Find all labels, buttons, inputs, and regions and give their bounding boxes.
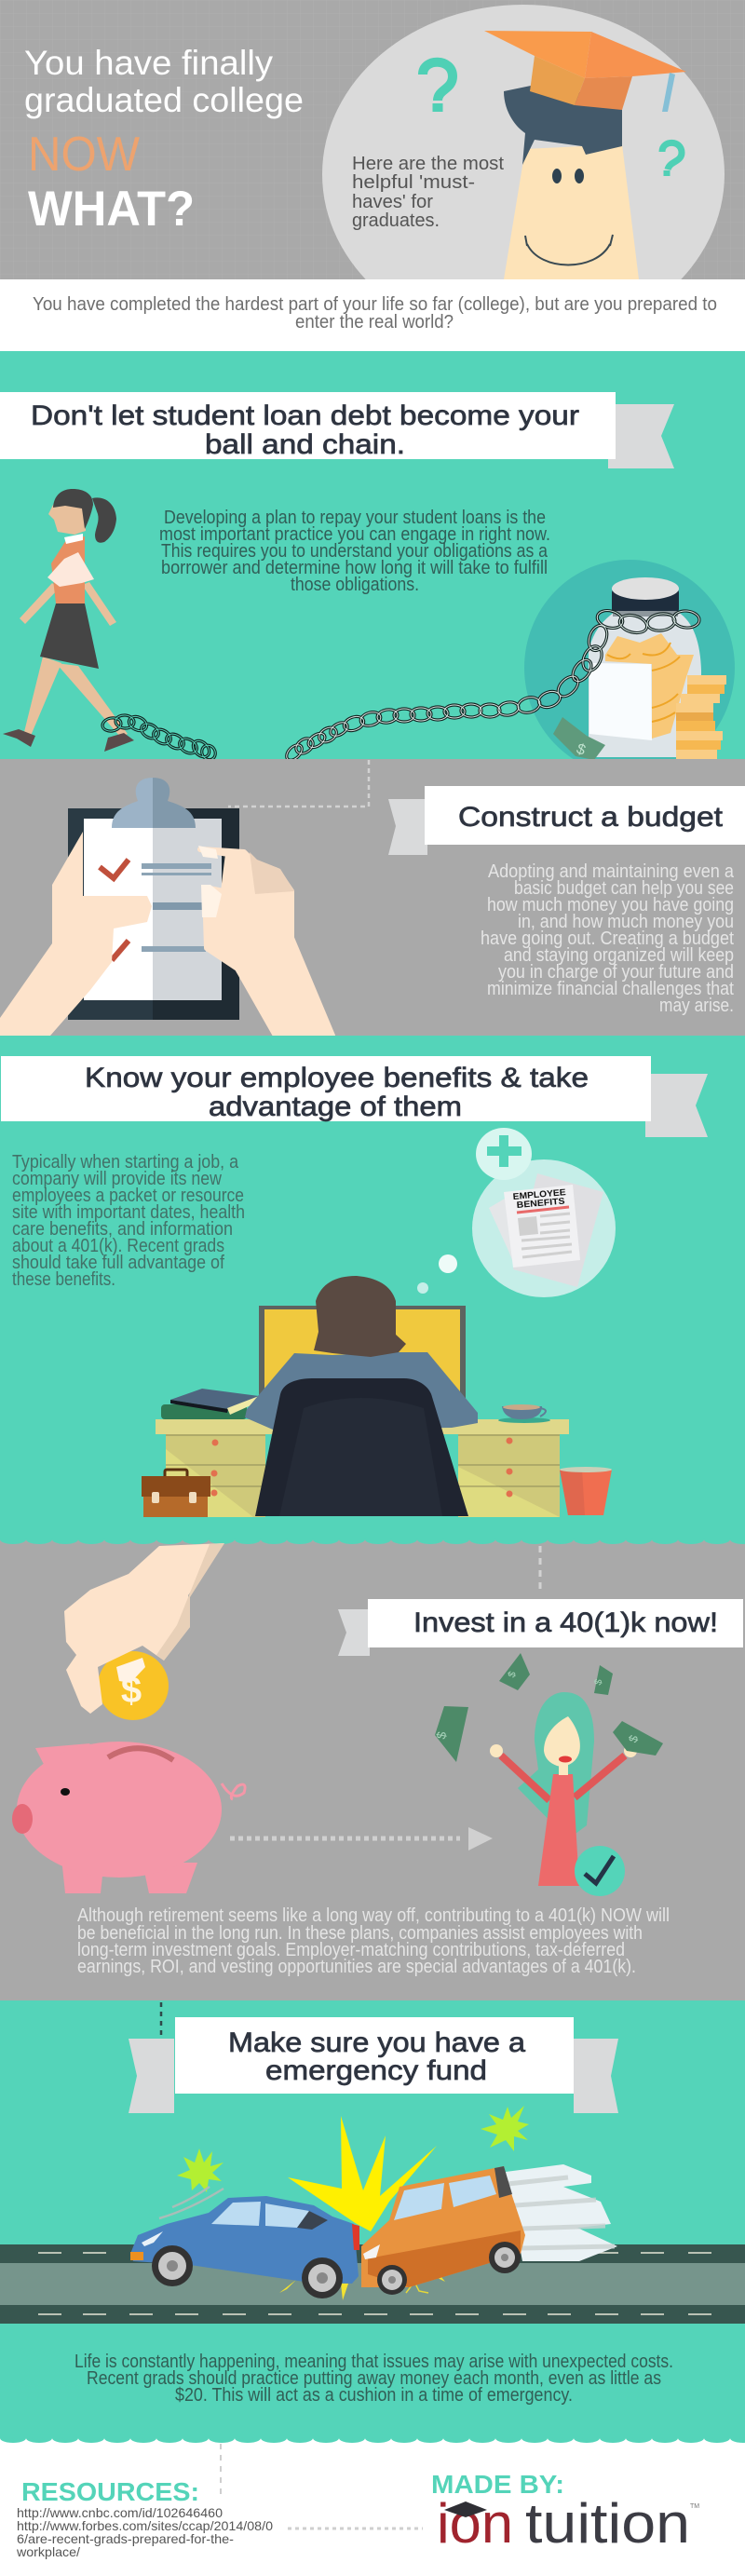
panel: invest in a 401k xyxy=(0,1539,745,2000)
header intro text: haves' for xyxy=(352,192,433,212)
body text: $20. This will act as a cushion in a time of emergency. xyxy=(175,2385,573,2406)
body text: earnings, ROI, and vesting opportunities are special advantages of a 401(k). xyxy=(77,1957,636,1977)
icon: thought bubble xyxy=(417,1128,616,1297)
heading banner xyxy=(368,1599,743,1647)
heading banner: ball and chain. xyxy=(205,429,405,460)
icon: briefcase xyxy=(142,1470,210,1517)
icon: thought bubble: BENEFITS xyxy=(516,1196,565,1211)
logo: iontuition: TM xyxy=(690,2503,699,2510)
icon: graduate character xyxy=(484,31,686,279)
body text: company will provide its new xyxy=(12,1169,222,1189)
icon: green spark left xyxy=(177,2149,224,2192)
resource links xyxy=(16,2505,273,2559)
body text: site with important dates, health xyxy=(12,1202,245,1223)
icon: blue car xyxy=(130,2196,359,2298)
panel: student loan debt xyxy=(0,351,745,776)
header intro text: helpful 'must- xyxy=(352,172,475,193)
icon: money bill xyxy=(553,717,605,760)
icon: right hand xyxy=(198,846,332,1036)
resource links: 6/are-recent-grads-prepared-for-the- xyxy=(17,2531,234,2546)
header intro text: graduates. xyxy=(352,210,440,231)
intro text xyxy=(33,294,717,332)
heading banner: Invest in a 40(1)k now! xyxy=(413,1607,718,1638)
road xyxy=(0,2244,745,2324)
icon: flying money: $ xyxy=(592,1678,604,1687)
body text: employees a packet or resource xyxy=(12,1186,244,1206)
icon: piggy bank xyxy=(12,1742,245,1893)
icon: books xyxy=(161,1389,259,1419)
heading banner xyxy=(175,2017,574,2094)
icon: flying money: $ xyxy=(507,1670,519,1679)
body text: be beneficial in the long run. In these plans, companies assist employees with xyxy=(77,1923,643,1944)
decorative scallop edge xyxy=(0,2438,745,2444)
body text: Although retirement seems like a long way off, contributing to a 401(k) NOW will xyxy=(77,1905,670,1926)
icon: chain to jar xyxy=(284,608,700,763)
intro text: enter the real world? xyxy=(295,312,454,332)
icon: flying money: $ xyxy=(433,1730,449,1741)
decorative scallop edge xyxy=(0,1539,745,1545)
body text xyxy=(74,2352,673,2406)
body text xyxy=(481,861,735,1016)
body text xyxy=(77,1905,670,1977)
header intro text xyxy=(352,154,504,231)
body text: Typically when starting a job, a xyxy=(12,1152,239,1173)
body text xyxy=(12,1152,245,1290)
icon: walking woman xyxy=(3,489,134,752)
body text: those obligations. xyxy=(291,575,419,595)
icon: left hand xyxy=(0,832,152,1036)
arrow xyxy=(230,1827,493,1851)
body text: Life is constantly happening, meaning that issues may arise with unexpected costs. xyxy=(74,2352,673,2372)
resources heading: RESOURCES: xyxy=(21,2477,199,2506)
icon: coin xyxy=(98,1651,169,1720)
body text: long-term investment goals. Employer-matching contributions, tax-deferred xyxy=(77,1940,625,1960)
ribbon tail xyxy=(388,799,427,855)
resource links: workplace/ xyxy=(16,2544,80,2559)
logo: iontuition: ion xyxy=(437,2492,513,2555)
body text: about a 401(k). Recent grads xyxy=(12,1236,224,1256)
icon: flying money: $ xyxy=(626,1732,642,1744)
icon: thought bubble: EMPLOYEE xyxy=(512,1187,566,1202)
heading banner: emergency fund xyxy=(265,2055,487,2086)
ribbon right xyxy=(574,2039,618,2113)
logo: iontuition: tuition xyxy=(525,2492,690,2555)
body text: most important practice you can engage in right now. xyxy=(159,524,550,545)
icon: question mark small xyxy=(662,142,682,176)
icon: waste bin xyxy=(560,1467,612,1515)
heading banner xyxy=(1,1056,651,1122)
icon: explosion xyxy=(288,2116,437,2231)
header intro text: Here are the most xyxy=(352,154,504,174)
heading banner: Know your employee benefits & take xyxy=(85,1063,589,1093)
heading banner: Make sure you have a xyxy=(228,2027,525,2058)
icon: check badge xyxy=(575,1846,625,1896)
intro text: You have completed the hardest part of your life so far (college), but are you prepared to xyxy=(33,294,717,315)
heading banner: Construct a budget xyxy=(458,802,724,833)
icon: green spark right xyxy=(481,2106,529,2151)
icon: happy woman xyxy=(490,1692,637,1886)
logo: iontuition xyxy=(437,2492,699,2555)
body text: Developing a plan to repay your student loans is the xyxy=(164,508,546,528)
body text: care benefits, and information xyxy=(12,1219,233,1240)
icon: money bill: $ xyxy=(575,741,588,759)
heading banner: advantage of them xyxy=(209,1091,462,1122)
body text: these benefits. xyxy=(12,1269,115,1290)
ribbon tail xyxy=(645,1074,708,1137)
header title: You have finally xyxy=(24,44,274,82)
icon: desk xyxy=(156,1419,569,1517)
body text xyxy=(159,508,550,595)
icon: clipboard xyxy=(68,778,239,1020)
body text: borrower and determine how long it will take to fulfill xyxy=(161,558,548,578)
icon: jar circle xyxy=(524,560,735,776)
header title: graduated college xyxy=(24,81,304,119)
icon: hand dropping coin xyxy=(64,1543,224,1714)
icon: flying money xyxy=(433,1653,663,1762)
icon: coffee cup xyxy=(498,1404,550,1423)
panel: construct a budget xyxy=(0,759,745,1036)
header title: WHAT? xyxy=(28,182,195,237)
resource links: http://www.cnbc.com/id/102646460 xyxy=(17,2505,223,2520)
icon: orange car xyxy=(361,2166,525,2295)
body text: Recent grads should practice putting away money each month, even as little as xyxy=(87,2368,661,2389)
panel: emergency fund xyxy=(0,2000,745,2440)
body text: This requires you to understand your obligations as a xyxy=(161,541,549,562)
header title: NOW xyxy=(28,128,140,182)
icon: question mark large xyxy=(423,62,453,112)
panel: header xyxy=(0,0,745,279)
ribbon left xyxy=(129,2039,174,2113)
heading banner: Don't let student loan debt become your xyxy=(31,400,579,431)
panel: footer xyxy=(0,2438,745,2576)
icon: coin: $ xyxy=(121,1670,142,1711)
icon: chain at ankle xyxy=(102,713,218,762)
header title xyxy=(24,44,304,237)
graduate circle backdrop xyxy=(322,5,725,279)
body text: may arise. xyxy=(659,996,734,1016)
made by heading: MADE BY: xyxy=(431,2470,564,2499)
icon: motion lines xyxy=(159,2164,617,2261)
icon: jar of coins xyxy=(589,577,726,759)
icon: monitor xyxy=(259,1306,466,1399)
heading banner xyxy=(425,786,745,845)
heading banner xyxy=(0,392,616,460)
panel: employee benefits xyxy=(0,1036,745,1544)
icon: impact sparks xyxy=(279,2272,445,2300)
resource links: http://www.forbes.com/sites/ccap/2014/08/0 xyxy=(17,2518,273,2533)
ribbon tail xyxy=(338,1609,370,1656)
ribbon tail xyxy=(608,404,674,468)
icon: person at desk xyxy=(245,1276,478,1516)
body text: should take full advantage of xyxy=(12,1253,224,1273)
